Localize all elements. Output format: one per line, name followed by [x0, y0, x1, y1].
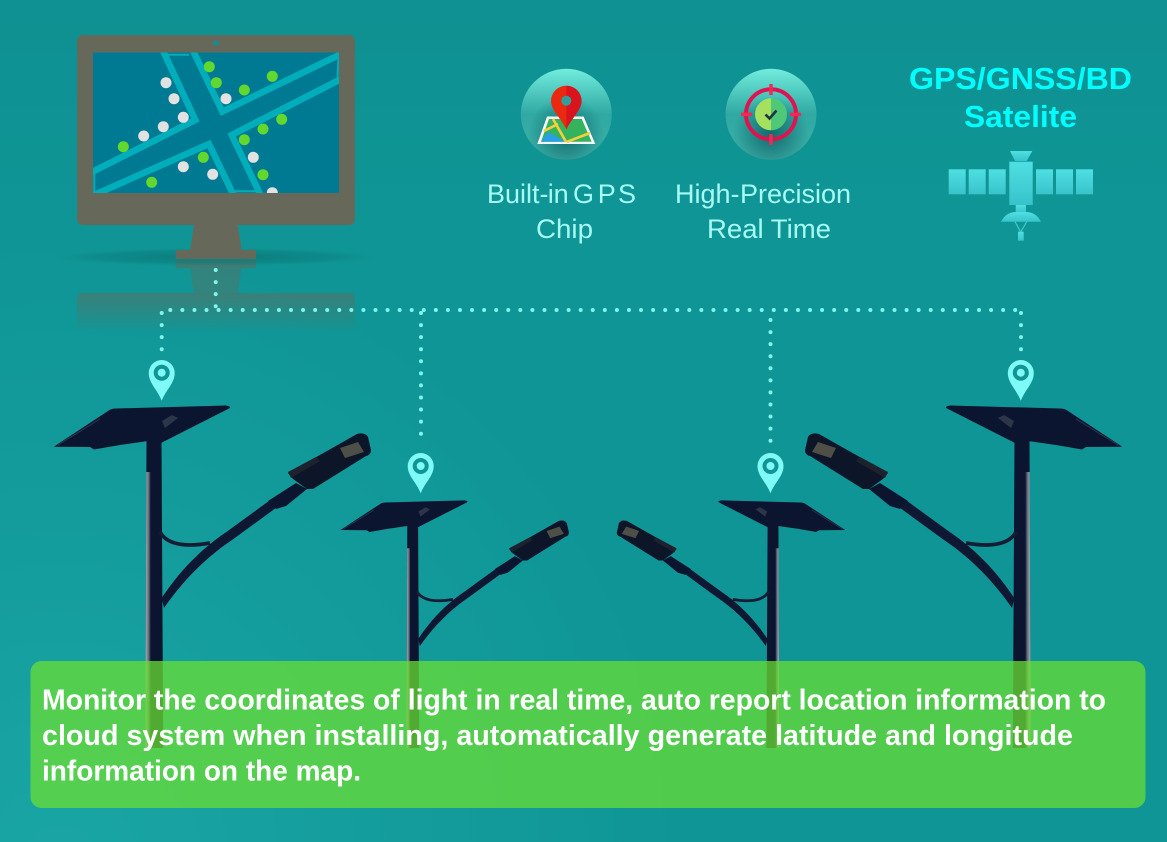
icon: satellite [949, 151, 1093, 241]
monitor shadow [56, 248, 376, 266]
label: Built-in GPS Chip: in [548, 179, 569, 209]
location pin: light 4 [1008, 360, 1034, 401]
panel: description [30, 661, 1146, 808]
heading: GPS/GNSS/BD Satelite: GPS/GNSS/BD [909, 62, 1132, 96]
icon: precision target [726, 69, 816, 160]
label: Built-in GPS Chip: G [573, 179, 594, 209]
description text: cloud system when installing, automatically generate latitude and longitude [42, 720, 1073, 752]
monitor [77, 35, 355, 259]
description text [42, 684, 1106, 788]
label: High-Precision Real Time [675, 179, 851, 244]
icon: GPS chip [521, 69, 612, 160]
location pin: light 2 [408, 453, 434, 493]
description text: Monitor the coordinates of light in real time, auto report location information to [42, 684, 1106, 716]
street light: right large [805, 406, 1122, 748]
label: High-Precision Real Time: Precision [740, 179, 851, 209]
road lines [91, 50, 342, 196]
location pin: light 3 [758, 453, 784, 493]
label: Built-in GPS Chip: P [598, 179, 616, 209]
white light markers [138, 77, 278, 198]
label: Built-in GPS Chip: Built- [487, 179, 549, 209]
monitor body [77, 35, 355, 225]
heading: GPS/GNSS/BD Satelite [909, 62, 1132, 134]
street light: left small [340, 500, 569, 748]
label: Built-in GPS Chip: S [618, 179, 636, 209]
street light: left large [54, 406, 371, 748]
green light markers [118, 61, 287, 188]
label: High-Precision Real Time: Real Time [707, 214, 831, 244]
street light: right small [616, 500, 846, 748]
location pin: light 1 [149, 360, 175, 401]
map screen [91, 50, 342, 198]
dotted network lines [162, 270, 1021, 444]
label: High-Precision Real Time: High- [675, 179, 740, 209]
description text: information on the map. [42, 756, 361, 788]
map sheet [537, 116, 595, 144]
monitor reflection [77, 260, 355, 330]
label: Built-in GPS Chip [487, 179, 636, 244]
monitor camera [213, 40, 219, 46]
heading: GPS/GNSS/BD Satelite: Satelite [964, 100, 1077, 134]
map pin [551, 86, 582, 130]
monitor stand [176, 225, 256, 259]
label: Built-in GPS Chip: Chip [536, 214, 593, 244]
